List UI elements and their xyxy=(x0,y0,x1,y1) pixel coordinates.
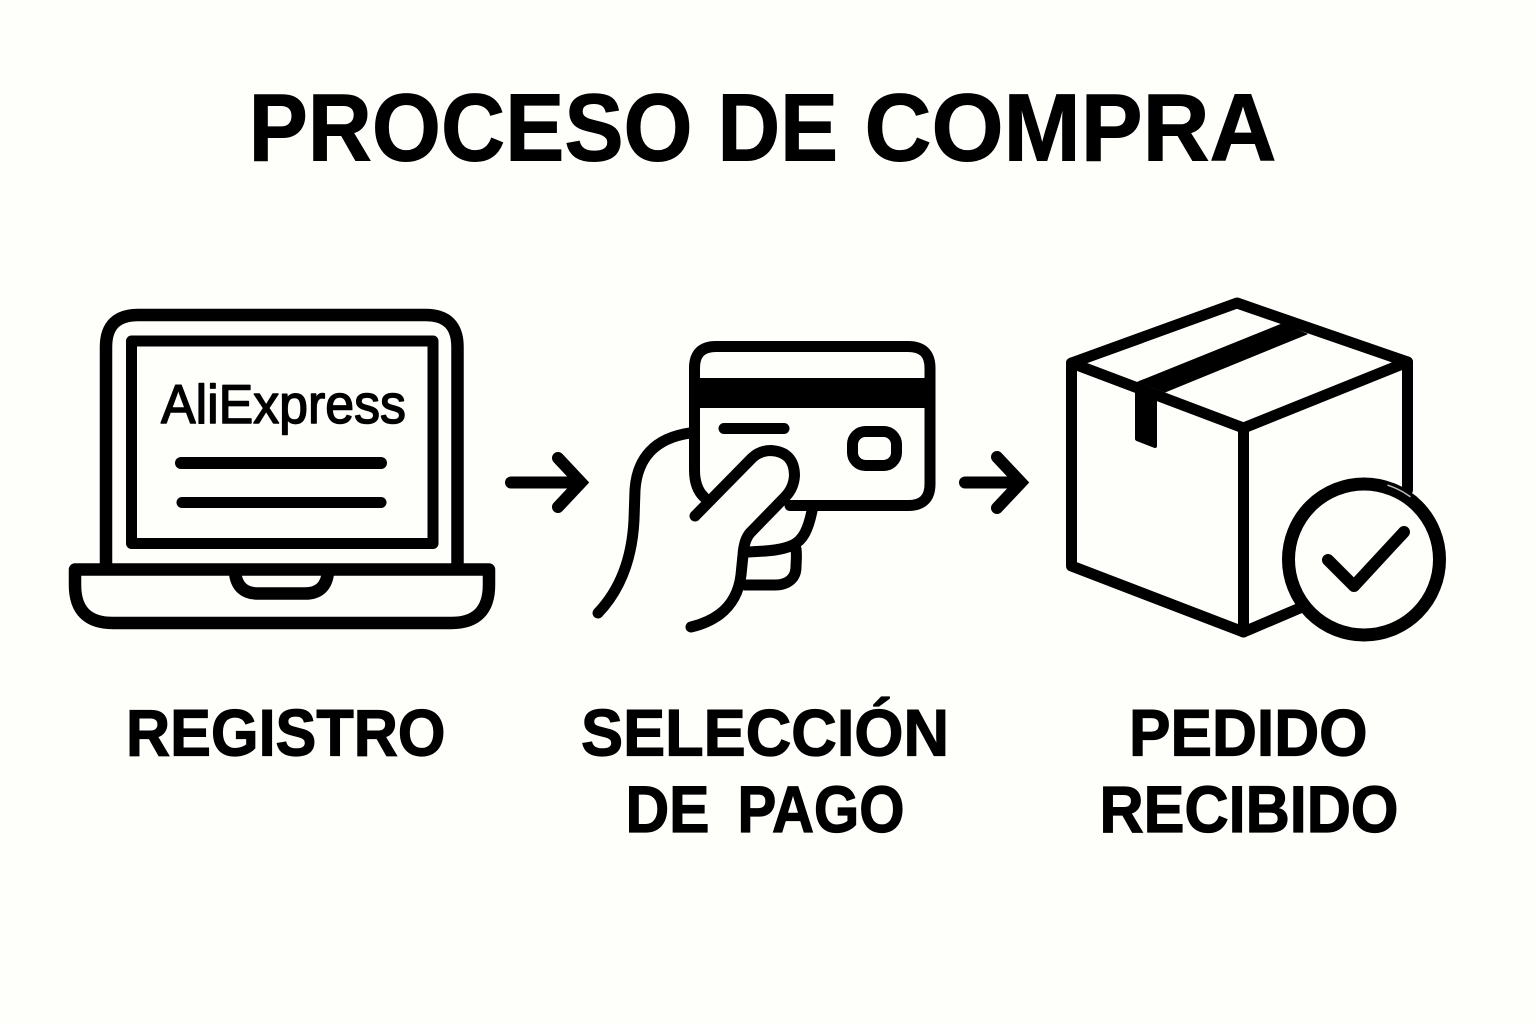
label: seleccion de pago: PAGO xyxy=(738,772,904,846)
label: pedido recibido: RECIBIDO xyxy=(1100,772,1398,846)
icon: laptop with AliExpress xyxy=(75,315,489,623)
label: seleccion de pago: SELECCIÓN xyxy=(581,696,949,770)
label: pedido recibido: PEDIDO xyxy=(1129,696,1368,770)
title: COMPRA xyxy=(864,74,1276,182)
title: PROCESO xyxy=(249,74,693,182)
icon: box with check xyxy=(1072,303,1440,635)
label: pedido recibido xyxy=(1100,696,1398,846)
label: registro: REGISTRO xyxy=(126,696,446,770)
logo text: AliExpress xyxy=(161,373,406,435)
title xyxy=(249,74,1277,182)
label: seleccion de pago: DE xyxy=(626,772,710,846)
arrow: pago to pedido xyxy=(965,457,1021,508)
arrow: registro to pago xyxy=(511,458,581,507)
title: DE xyxy=(718,74,838,182)
label: seleccion de pago xyxy=(581,696,949,846)
icon: hand holding card xyxy=(598,346,930,627)
